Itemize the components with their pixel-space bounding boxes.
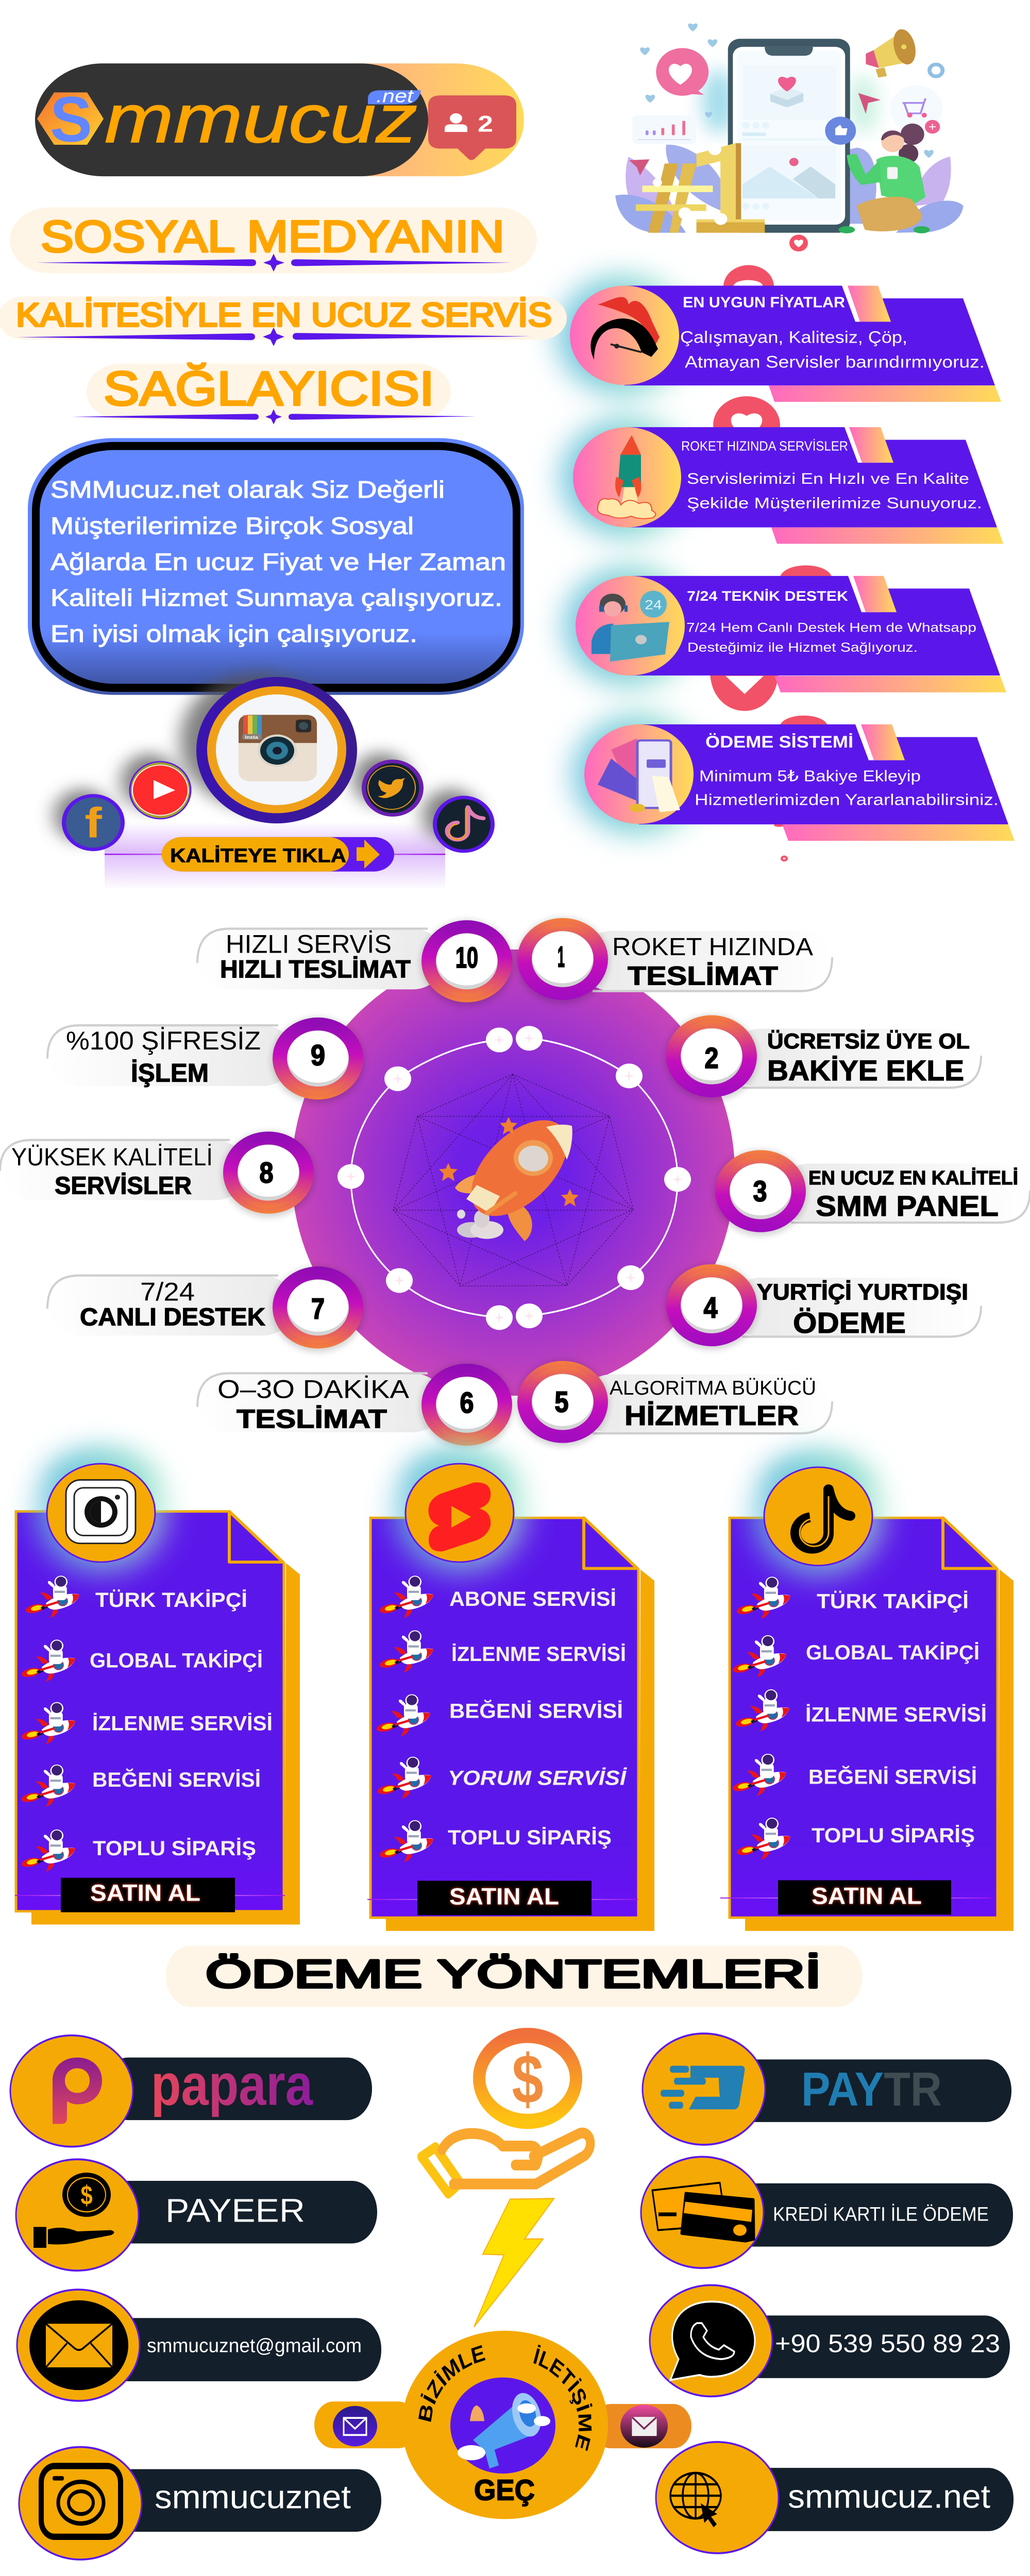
row icon xyxy=(17,2290,140,2401)
heading line 3: SAĞLAYICISI xyxy=(104,362,434,415)
intro text xyxy=(50,477,506,647)
intro text panel xyxy=(28,438,524,695)
panel: odeme sistemi: Hizmetlerimizden Yararlanabilirsiniz. xyxy=(695,791,999,809)
row label: smmucuznet xyxy=(155,2479,351,2516)
label: O–3O DAKİKA xyxy=(217,1375,409,1404)
button text: KALİTEYE TIKLA xyxy=(170,844,346,867)
pill xyxy=(47,1025,295,1086)
service list: İZLENME SERVİSİ xyxy=(451,1642,626,1666)
row: website xyxy=(656,2442,1014,2553)
card sheet xyxy=(16,1512,284,1911)
item 4 xyxy=(665,1264,981,1350)
card fold xyxy=(943,1518,997,1568)
header icon: youtube shorts xyxy=(406,1464,514,1562)
row pill xyxy=(721,2183,1013,2247)
badge xyxy=(665,1015,758,1100)
row pill xyxy=(732,2315,1010,2378)
logo xyxy=(35,63,524,176)
buy button: SATIN AL xyxy=(812,1883,922,1909)
card: tiktok services xyxy=(720,1458,1014,1931)
label: %100 ŞİFRESİZ xyxy=(66,1026,261,1056)
paper plane right xyxy=(858,93,881,114)
button glow band xyxy=(105,822,445,890)
panel: en uygun fiyatlar xyxy=(570,286,1001,402)
rockets xyxy=(732,1577,790,1860)
row: instagram xyxy=(19,2447,381,2560)
badge xyxy=(516,918,609,1004)
row icon xyxy=(643,2033,765,2145)
card sheet xyxy=(730,1518,998,1918)
social icon: facebook: f xyxy=(85,800,102,847)
red heart badges behind upper panels xyxy=(713,265,780,454)
service list: ABONE SERVİSİ xyxy=(449,1587,616,1611)
left connector xyxy=(314,2401,417,2448)
label: ALGORİTMA BÜKÜCÜ xyxy=(610,1376,816,1399)
social icon: youtube xyxy=(130,761,191,819)
icon: classic instagram camera: Insta xyxy=(245,735,258,740)
badge xyxy=(665,1264,758,1350)
arrow xyxy=(357,840,380,869)
pill xyxy=(0,1140,247,1200)
panel: odeme sistemi xyxy=(584,724,1015,841)
service list: BEĞENİ SERVİSİ xyxy=(92,1768,261,1791)
cyan glow behind feature panels xyxy=(559,276,703,835)
service list: YORUM SERVİSİ xyxy=(448,1766,628,1789)
logo gradient pill xyxy=(35,63,524,176)
heading line 2: KALİTESİYLE EN UCUZ SERVİS xyxy=(16,296,552,333)
papara wordmark: papara xyxy=(151,2053,313,2117)
social icon: facebook xyxy=(62,794,125,851)
label: YÜKSEK KALİTELİ xyxy=(11,1143,213,1171)
bottom label: GEÇ xyxy=(474,2473,535,2506)
label: EN UCUZ EN KALİTELİ xyxy=(808,1167,1018,1189)
service list: TÜRK TAKİPÇİ xyxy=(817,1590,969,1613)
chart card xyxy=(632,115,696,144)
right leaves xyxy=(850,148,964,233)
pill xyxy=(778,1164,1030,1223)
row pill xyxy=(721,2059,1011,2122)
header block: logo and headings xyxy=(0,63,567,425)
icon: classic instagram camera xyxy=(239,715,317,781)
number: 7 xyxy=(311,1293,325,1325)
row: payeer xyxy=(16,2159,377,2270)
row label: smmucuznet@gmail.com xyxy=(147,2335,362,2357)
row pill xyxy=(103,2469,381,2532)
item 5 xyxy=(516,1361,832,1446)
intro text: En iyisi olmak için çalışıyoruz. xyxy=(50,621,417,647)
gear xyxy=(930,64,942,76)
pill xyxy=(580,931,832,991)
inner disc xyxy=(450,2378,555,2473)
row: papara xyxy=(10,2036,372,2147)
item 8: SERVİSLER xyxy=(55,1172,192,1199)
badge xyxy=(420,920,513,1006)
number: 4 xyxy=(704,1291,718,1324)
shopping cart xyxy=(890,85,942,133)
number: 5 xyxy=(554,1386,568,1418)
center rocket xyxy=(439,1101,583,1241)
buy button xyxy=(417,1881,592,1915)
payment heading xyxy=(166,1945,863,2007)
gradient strip xyxy=(774,676,1006,692)
social icon: twitter xyxy=(362,759,424,817)
item 3: SMM PANEL xyxy=(816,1191,999,1223)
row: whatsapp xyxy=(650,2285,1010,2396)
heading line 2 xyxy=(0,296,567,346)
number: 3 xyxy=(753,1175,767,1208)
dotted star figure xyxy=(393,1074,633,1286)
ring nodes xyxy=(337,1026,691,1330)
follower count: 2 xyxy=(478,111,493,137)
badge disc xyxy=(402,2331,608,2519)
row icon xyxy=(650,2285,772,2396)
woman with phone xyxy=(838,124,930,233)
panel text: 7/24 Hem Canlı Destek Hem de Whatsapp xyxy=(686,620,976,635)
intro block: text panel, social icons and button xyxy=(28,438,524,890)
number: 9 xyxy=(311,1039,325,1072)
small heart below illustration xyxy=(789,234,808,251)
row icon xyxy=(656,2442,779,2553)
badge xyxy=(516,1361,609,1446)
24 badge: 24 xyxy=(645,598,662,612)
right connector xyxy=(593,2404,691,2448)
logo letter S: S xyxy=(50,84,92,155)
heading line 1 xyxy=(10,207,537,274)
gradient tab xyxy=(853,576,897,612)
service list: TOPLU SİPARİŞ xyxy=(812,1824,975,1847)
pill xyxy=(580,1375,832,1433)
icon: lightning bolt xyxy=(474,2198,554,2327)
pill xyxy=(197,1373,445,1432)
gradient tab xyxy=(861,724,905,760)
logo dark pill xyxy=(35,63,428,176)
phone xyxy=(728,39,850,233)
service cards xyxy=(15,1452,1014,1931)
item 7 xyxy=(47,1266,364,1352)
logo wordmark: mmucuz xyxy=(105,80,417,157)
icon circle: payment cards xyxy=(584,724,694,824)
payment and contact section xyxy=(9,1945,1014,2561)
logo net text: .net xyxy=(376,85,414,106)
paytr wordmark: PAYTR xyxy=(801,2063,942,2116)
badge xyxy=(272,1266,364,1352)
gradient strip xyxy=(782,824,1015,841)
pill xyxy=(47,1276,295,1335)
icon circle: support agent xyxy=(576,576,685,675)
logo hexagon xyxy=(37,92,104,145)
number: 10 xyxy=(455,941,478,974)
icon circle: rocket xyxy=(573,427,681,528)
icon: hand with dollar coin xyxy=(421,2036,590,2194)
item 1: 1 xyxy=(558,941,565,973)
intro text: Müşterilerimize Birçok Sosyal xyxy=(50,513,414,539)
number one sign xyxy=(636,143,765,233)
badge xyxy=(420,1364,513,1449)
header icon: tiktok xyxy=(764,1467,872,1566)
row icon xyxy=(10,2036,133,2147)
service list: BEĞENİ SERVİSİ xyxy=(808,1765,977,1788)
gradient tab xyxy=(848,286,891,322)
header icon: instagram xyxy=(47,1464,155,1562)
badge xyxy=(222,1131,315,1217)
radial diagram xyxy=(0,918,1030,1449)
card: instagram services xyxy=(15,1454,300,1925)
card: youtube services xyxy=(367,1454,654,1931)
service list xyxy=(805,1590,987,1847)
intro text: Kaliteli Hizmet Sunmaya çalışıyoruz. xyxy=(50,585,502,611)
dollar sign: $ xyxy=(80,2180,93,2210)
number: 6 xyxy=(460,1386,474,1419)
card fold xyxy=(584,1518,637,1568)
number: 2 xyxy=(705,1042,718,1075)
buy button xyxy=(778,1880,951,1914)
row label: KREDİ KARTI İLE ÖDEME xyxy=(773,2203,989,2225)
gradient strip xyxy=(769,385,1001,402)
item 10 xyxy=(197,920,513,1006)
illustration glow xyxy=(702,69,735,134)
faint glow above the cards xyxy=(49,1452,870,1514)
card fold xyxy=(229,1512,283,1562)
buy button: SATIN AL xyxy=(449,1883,559,1909)
buy button: SATIN AL xyxy=(90,1880,200,1906)
purple line xyxy=(15,1895,285,1896)
item 8 xyxy=(0,1131,315,1217)
item 4: ÖDEME xyxy=(793,1307,906,1339)
item 1: TESLİMAT xyxy=(628,961,778,991)
buy button xyxy=(61,1878,235,1912)
service list xyxy=(448,1587,628,1849)
label: YURTİÇİ YURTDIŞI xyxy=(757,1279,968,1304)
row: email xyxy=(17,2290,381,2401)
rockets xyxy=(376,1575,433,1862)
panel text: Çalışmayan, Kalitesiz, Çöp, xyxy=(680,328,907,347)
social icon shadows xyxy=(54,673,479,842)
curved text xyxy=(431,2358,579,2468)
card back xyxy=(31,1563,300,1925)
intro text: SMMucuz.net olarak Siz Değerli xyxy=(50,477,445,503)
panel: en uygun fiyatlar: Atmayan Servisler barındırmıyoruz. xyxy=(685,353,985,371)
panel title: ÖDEME SİSTEMİ xyxy=(705,733,853,751)
item 6 xyxy=(197,1364,513,1449)
row label: +90 539 550 89 23 xyxy=(775,2330,1000,2358)
service list: İZLENME SERVİSİ xyxy=(805,1703,987,1726)
central disc xyxy=(292,950,735,1396)
icon circle: speedometer xyxy=(570,286,679,385)
pill xyxy=(729,1278,981,1337)
service list: BEĞENİ SERVİSİ xyxy=(449,1699,623,1722)
badge xyxy=(714,1150,807,1235)
label: ROKET HIZINDA xyxy=(612,933,813,960)
panel title: ROKET HIZINDA SERVİSLER xyxy=(681,438,848,453)
megaphone xyxy=(458,2387,550,2468)
panel title: EN UYGUN FİYATLAR xyxy=(683,294,845,311)
row icon xyxy=(19,2447,142,2560)
pill xyxy=(197,929,445,989)
button line xyxy=(105,854,445,855)
megaphone xyxy=(866,27,919,78)
panel: teknik destek: Desteğimiz ile Hizmet Sağlıyoruz. xyxy=(687,640,918,655)
label: 7/24 xyxy=(140,1278,195,1307)
item 5: HİZMETLER xyxy=(624,1400,799,1431)
item 7: CANLI DESTEK xyxy=(80,1303,265,1331)
badge xyxy=(272,1018,364,1103)
row label: PAYEER xyxy=(165,2193,305,2229)
header glow xyxy=(37,1454,165,1572)
service list: GLOBAL TAKİPÇİ xyxy=(806,1641,980,1664)
item 9 xyxy=(47,1018,364,1103)
curved label right: İLETİŞİME xyxy=(533,2344,593,2451)
lower feature panels xyxy=(576,565,1015,861)
item 2: BAKİYE EKLE xyxy=(767,1055,964,1087)
service list: TOPLU SİPARİŞ xyxy=(93,1837,256,1860)
paper plane left xyxy=(629,159,650,176)
curved label left: BİZİMLE xyxy=(418,2345,485,2422)
row pill xyxy=(103,2058,372,2120)
floating blue hearts xyxy=(640,24,934,158)
service list: GLOBAL TAKİPÇİ xyxy=(90,1649,263,1672)
panel: roket hizinda: Şekilde Müşterilerimize Sunuyoruz. xyxy=(687,494,982,512)
rockets xyxy=(21,1575,79,1871)
intro text: Ağlarda En ucuz Fiyat ve Her Zaman xyxy=(50,549,506,575)
panel: roket hizinda xyxy=(573,427,1003,544)
panel title: 7/24 TEKNİK DESTEK xyxy=(687,589,848,604)
item 2 xyxy=(665,1015,981,1100)
big instagram circle xyxy=(196,677,357,823)
row pill xyxy=(103,2318,381,2381)
contact badge xyxy=(314,2331,691,2519)
row icon xyxy=(641,2157,764,2268)
diagram core xyxy=(292,950,735,1396)
item 1 xyxy=(516,918,832,1004)
row label: smmucuz.net xyxy=(788,2478,990,2515)
left leaves xyxy=(615,145,722,233)
service list xyxy=(90,1588,273,1860)
panel text: Servislerimizi En Hızlı ve En Kalite xyxy=(687,470,969,487)
thumbs up ball xyxy=(825,116,856,145)
row pill xyxy=(742,2468,1014,2531)
payment heading: ÖDEME YÖNTEMLERİ xyxy=(206,1952,821,1996)
ring arcs xyxy=(351,1040,499,1317)
dollar sign: $ xyxy=(512,2041,544,2119)
heart speech bubble xyxy=(656,48,708,96)
header glow xyxy=(395,1454,524,1572)
illustration: phone with number one and woman xyxy=(615,24,964,233)
insta tag xyxy=(242,734,261,739)
item 6: TESLİMAT xyxy=(237,1404,387,1434)
service list: TÜRK TAKİPÇİ xyxy=(95,1588,247,1612)
row icon xyxy=(16,2159,139,2270)
social icon: tiktok xyxy=(433,796,495,853)
logo net tag xyxy=(368,90,421,104)
notification bubble xyxy=(428,95,516,160)
red heart badges behind lower panels xyxy=(710,565,832,861)
label: HIZLI SERVİS xyxy=(226,930,392,959)
service list: TOPLU SİPARİŞ xyxy=(448,1826,612,1849)
header glow xyxy=(754,1458,883,1575)
purple line xyxy=(720,1897,991,1899)
row: credit card xyxy=(641,2157,1013,2268)
call to action button xyxy=(162,837,394,872)
row pill xyxy=(103,2181,377,2243)
row: paytr xyxy=(643,2033,1011,2145)
service list: İZLENME SERVİSİ xyxy=(92,1711,273,1735)
card back xyxy=(386,1569,654,1931)
pill xyxy=(729,1029,981,1088)
item 10: HIZLI TESLİMAT xyxy=(220,955,411,983)
card sheet xyxy=(370,1518,638,1918)
card back xyxy=(745,1569,1014,1931)
panel text: Minimum 5₺ Bakiye Ekleyip xyxy=(699,768,921,785)
panel: teknik destek xyxy=(576,576,1006,692)
item 9: İŞLEM xyxy=(131,1058,209,1088)
gradient strip xyxy=(771,528,1003,544)
number: 8 xyxy=(260,1157,274,1189)
label: ÜCRETSİZ ÜYE OL xyxy=(767,1029,970,1053)
gradient tab xyxy=(849,427,893,463)
heading line 1: SOSYAL MEDYANIN xyxy=(41,212,504,261)
item 3 xyxy=(714,1150,1030,1235)
purple line xyxy=(367,1899,638,1900)
